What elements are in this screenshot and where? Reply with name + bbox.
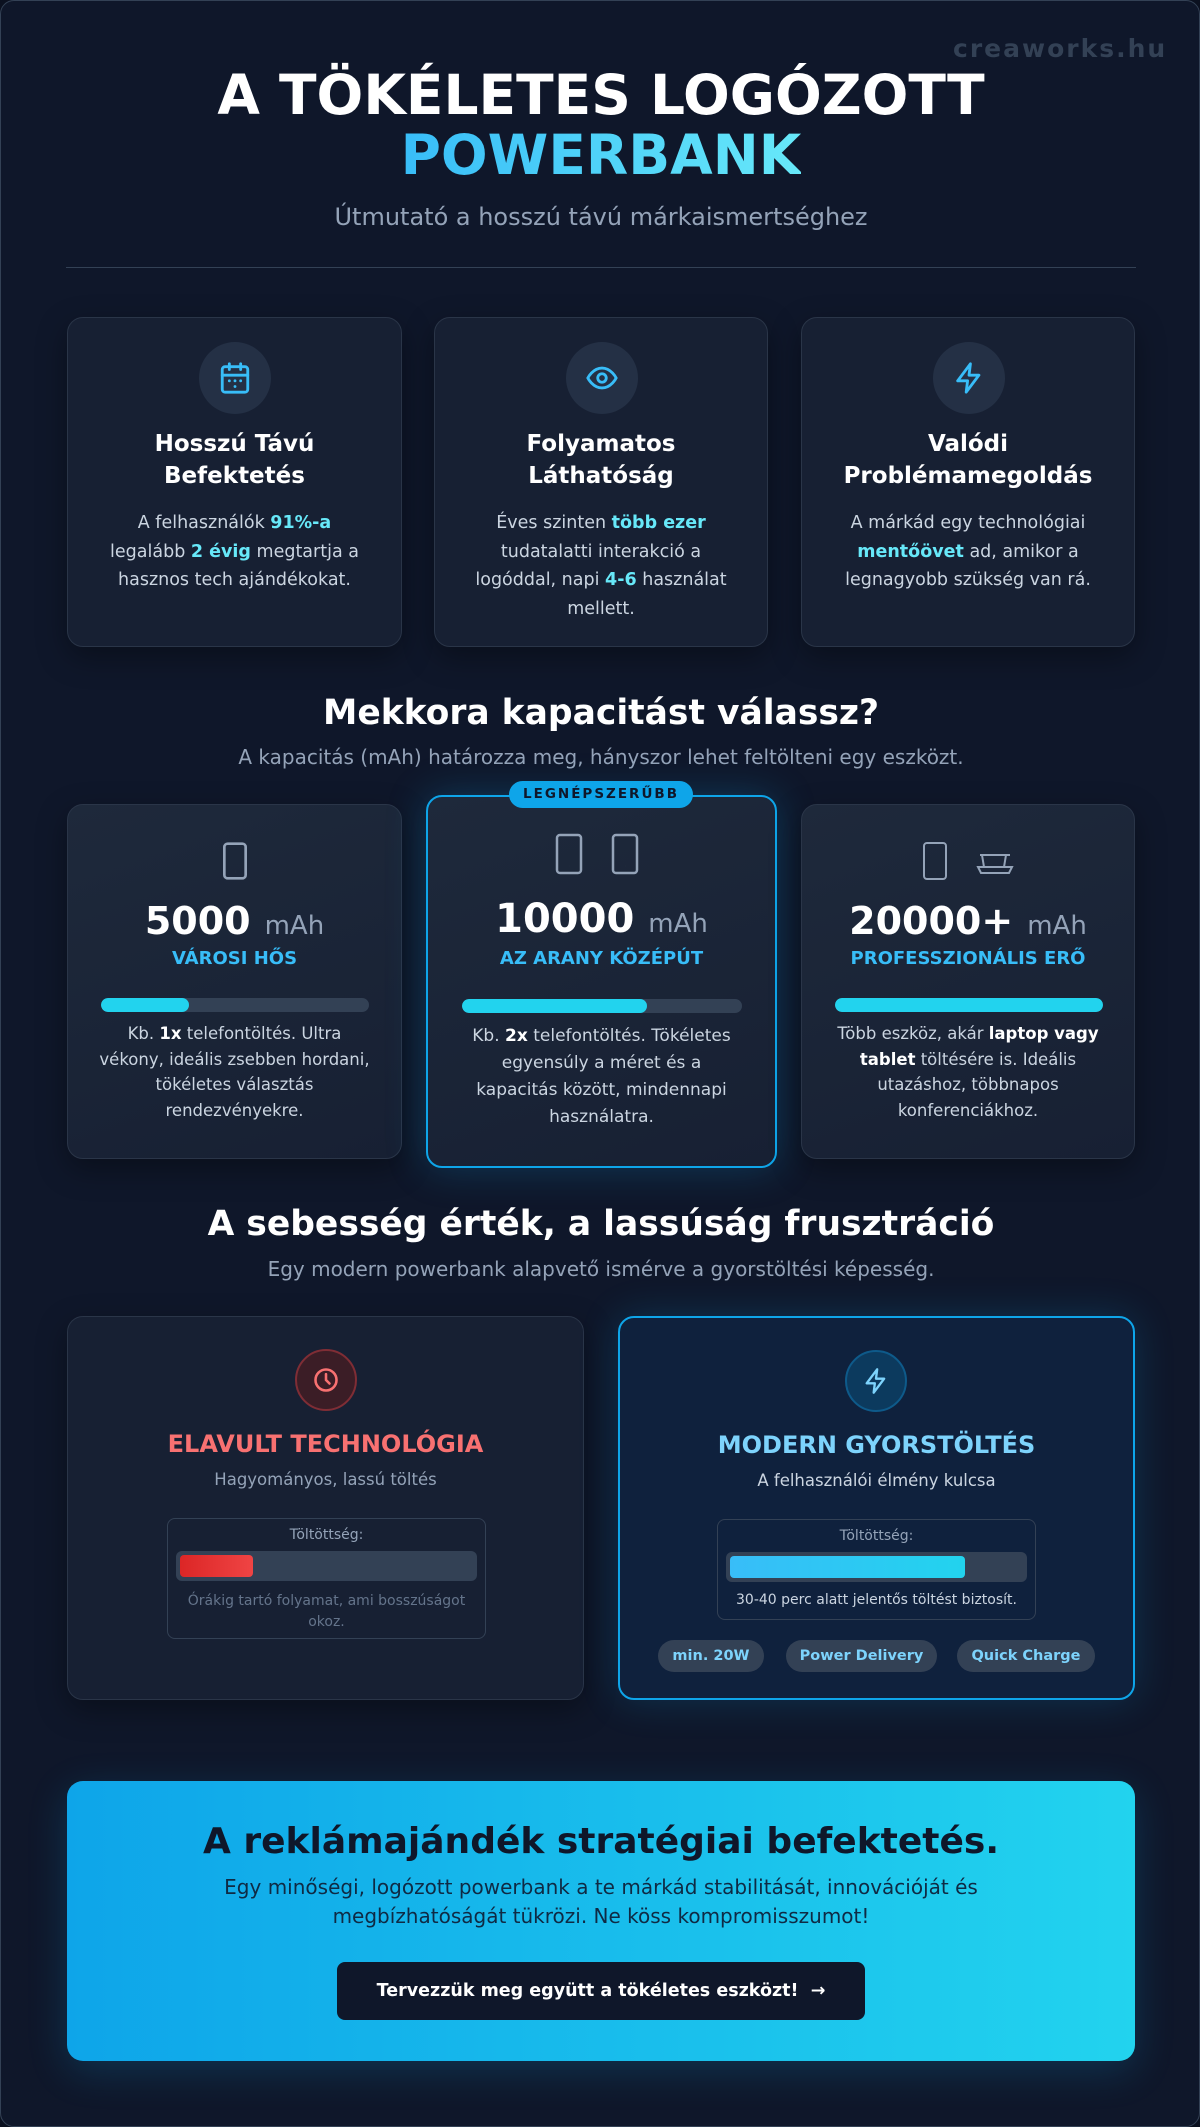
text: Éves szinten több ezer tudatalatti interakció a logóddal, napi 4-6 használat mellett. [475, 513, 727, 619]
heading: Láthatóság [528, 463, 674, 489]
heading: Befektetés [164, 463, 305, 489]
panel: modern fast charging [618, 1316, 1135, 1700]
pill: Quick Charge [957, 1640, 1095, 1672]
heading: Folyamatos [527, 431, 675, 457]
heading: capacity: Mekkora kapacitást válassz? [323, 693, 879, 733]
pill: Power Delivery [786, 1640, 937, 1672]
text: Több eszköz, akár laptop vagy tablet töltésére is. Ideális utazáshoz, többnapos konferenciákhoz. [837, 1024, 1099, 1120]
heading: speed: A sebesség érték, a lassúság frusztráció [208, 1204, 994, 1244]
heading: Valódi [928, 431, 1008, 457]
capacity number: 5000 mAh [145, 899, 324, 943]
icon: eye [566, 342, 638, 414]
panel: outdated technology [67, 1316, 584, 1700]
subheading: speed: Egy modern powerbank alapvető ismérve a gyorstöltési képesség. [268, 1257, 934, 1281]
charge box: Órákig tartó folyamat, ami bosszúságot okoz. [188, 1593, 465, 1630]
text: Kb. 2x telefontöltés. Tökéletes egyensúly a méret és a kapacitás között, mindennapi használatra. [472, 1026, 731, 1127]
icon: phone and laptop [923, 842, 1014, 880]
watermark: creaworks.hu [953, 34, 1167, 63]
charge box [167, 1518, 486, 1639]
label: PROFESSZIONÁLIS ERŐ [851, 948, 1085, 969]
charge box: Töltöttség: [840, 1528, 913, 1544]
charge box: Töltöttség: [290, 1527, 363, 1543]
pill: min 20W [658, 1640, 764, 1672]
heading [155, 431, 314, 489]
heading: ELAVULT TECHNOLÓGIA [168, 1430, 483, 1458]
icon: calendar [199, 342, 271, 414]
heading: MODERN GYORSTÖLTÉS [718, 1431, 1035, 1459]
text: A felhasználók 91%-a legalább 2 évig megtartja a hasznos tech ajándékokat. [110, 513, 359, 590]
panel: 10000 mAh [426, 795, 777, 1168]
icon: bolt [845, 1350, 907, 1412]
bar [101, 998, 369, 1012]
panel: 20000 mAh [801, 804, 1135, 1159]
panel: visibility [434, 317, 768, 647]
pill: min 20W: min. 20W [672, 1648, 750, 1664]
bar: fast [726, 1552, 1027, 1582]
bar [835, 998, 1103, 1012]
subtitle: Útmutató a hosszú távú márkaismertséghez [334, 203, 868, 231]
CTA button: Tervezzük meg együtt a tökéletes eszközt! → [377, 1981, 825, 2001]
title: POWERBANK [401, 123, 801, 187]
text: Kb. 1x telefontöltés. Ultra vékony, ideális zsebben hordani, tökéletes választás rendezvényekre. [99, 1024, 370, 1120]
title: A TÖKÉLETES LOGÓZOTT [217, 63, 985, 127]
panel: problem solving [801, 317, 1135, 647]
title [217, 62, 985, 187]
pill: Power Delivery: Power Delivery [800, 1648, 923, 1664]
panel: long-term investment [67, 317, 402, 647]
CTA panel [67, 1781, 1135, 2061]
capacity number: 10000 mAh [495, 896, 708, 942]
bar: slow [176, 1551, 477, 1581]
subheading: capacity: A kapacitás (mAh) határozza meg, hányszor lehet feltölteni egy eszközt. [238, 745, 964, 769]
heading [844, 431, 1092, 489]
panel: 5000 mAh [67, 804, 402, 1159]
badge: most popular [509, 781, 693, 808]
text: A márkád egy technológiai mentőövet ad, amikor a legnagyobb szükség van rá. [845, 513, 1091, 590]
capacity number: 20000+ mAh [849, 899, 1087, 943]
heading [527, 431, 675, 489]
subtext: Hagyományos, lassú töltés [214, 1470, 437, 1489]
pill: Quick Charge: Quick Charge [971, 1648, 1081, 1664]
charge box: 30-40 perc alatt jelentős töltést biztosít. [736, 1592, 1017, 1608]
CTA heading: A reklámajándék stratégiai befektetés. [203, 1821, 999, 1862]
CTA text: Egy minőségi, logózott powerbank a te márkád stabilitását, innovációját és megbízhatóságát tükrözi. Ne köss kompromisszumot! [224, 1875, 978, 1928]
icon: clock [295, 1349, 357, 1411]
badge: most popular: LEGNÉPSZERŰBB [523, 786, 679, 802]
icon: bolt [933, 342, 1005, 414]
CTA button [337, 1962, 865, 2020]
subtext: A felhasználói élmény kulcsa [757, 1471, 996, 1490]
icon: phone [223, 842, 247, 880]
icon: two phones [556, 834, 638, 874]
bar [462, 999, 742, 1013]
heading: Hosszú Távú [155, 431, 314, 457]
heading: Problémamegoldás [844, 463, 1092, 489]
label: AZ ARANY KÖZÉPÚT [500, 948, 703, 969]
label: VÁROSI HŐS [172, 948, 297, 969]
charge box [717, 1519, 1036, 1620]
